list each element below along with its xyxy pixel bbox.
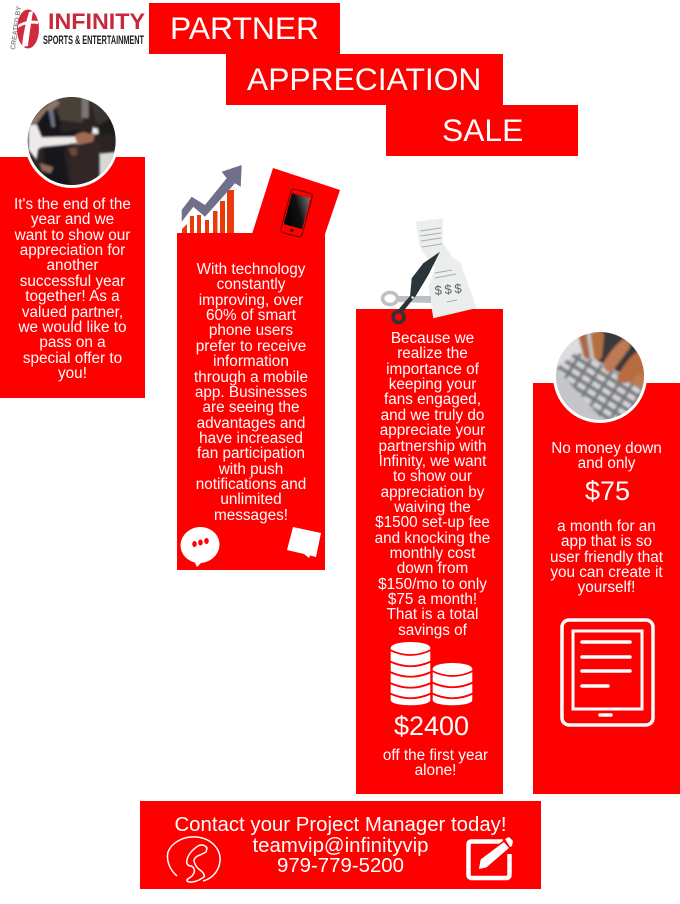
text: monthly price description: user friendly that <box>550 549 663 566</box>
text: offer explanation: That is a total <box>387 606 478 623</box>
panel: mobile app adoption <box>177 233 325 570</box>
title block: APPRECIATION: APPRECIATION <box>247 61 481 97</box>
photo: hands typing on keyboard <box>554 332 646 423</box>
text: offer explanation: importance of <box>386 361 479 378</box>
text: mobile app statistics: through a mobile <box>194 369 308 386</box>
text: contact call to action: 979-779-5200 <box>277 855 404 877</box>
text: monthly price description: you can create it <box>550 564 663 581</box>
text: appreciation message: special offer to <box>23 350 122 367</box>
text: mobile app statistics: 60% of smart <box>206 307 296 324</box>
title block: PARTNER: PARTNER <box>170 10 319 46</box>
text: mobile app statistics: phone users <box>209 322 293 339</box>
panel: app price <box>533 383 680 794</box>
text: offer explanation: savings of <box>398 622 467 639</box>
text: mobile app statistics: constantly <box>217 276 285 293</box>
text: offer explanation: partnership with <box>378 438 486 455</box>
logo: Infinity Sports & Entertainment: CREATED BY <box>10 5 23 50</box>
title block: SALE <box>386 105 578 156</box>
text: monthly price description: a month for an <box>557 518 656 535</box>
text: mobile app statistics: messages! <box>214 507 288 524</box>
text: contact call to action <box>174 814 507 877</box>
text: offer explanation: Because we <box>391 330 474 347</box>
text: mobile app statistics: With technology <box>197 261 305 278</box>
text: offer explanation: $75 a month! <box>388 591 477 608</box>
text: monthly price description <box>550 518 663 596</box>
text: appreciation message: another <box>47 257 98 274</box>
icon: phone handset in circle <box>166 836 221 883</box>
text: contact call to action: Contact your Project Manager today! <box>174 814 507 836</box>
panel: contact footer <box>140 801 541 889</box>
icon: stacks of coins <box>390 642 472 706</box>
text: contact call to action: teamvip@infinityvip <box>253 835 428 857</box>
text: no money down <box>551 440 662 472</box>
figure: $75 monthly price: $75 <box>585 476 630 506</box>
icon: tilted red tab with smartphone <box>252 168 340 238</box>
text: appreciation message: year and we <box>31 211 114 228</box>
text: offer explanation: monthly cost <box>390 545 475 562</box>
text: mobile app statistics: have increased <box>199 430 303 447</box>
text: offer explanation: down from <box>397 560 468 577</box>
text: monthly price description: yourself! <box>578 579 635 596</box>
text: appreciation message: valued partner, <box>22 304 123 321</box>
text: mobile app statistics: are seeing the <box>203 399 299 416</box>
text: appreciation message: pass on a <box>39 334 106 351</box>
text: offer explanation: waiving the <box>394 499 471 516</box>
text: mobile app statistics: information <box>213 353 289 370</box>
text: mobile app statistics: advantages and <box>197 415 305 432</box>
figure: $2400 savings: $2400 <box>394 711 469 741</box>
text: mobile app statistics: with push <box>219 461 283 478</box>
text: offer explanation: $150/mo to only <box>378 576 487 593</box>
text: no money down: No money down <box>551 440 662 457</box>
text: offer explanation: $1500 set-up fee <box>375 514 490 531</box>
icon: square speech bubble <box>287 527 321 558</box>
logo: Infinity Sports & Entertainment: INFINITY <box>48 9 145 34</box>
text: off the first year: alone! <box>415 762 456 779</box>
text: appreciation message: successful year <box>20 273 125 290</box>
text: no money down: and only <box>578 455 635 472</box>
text: appreciation message <box>14 196 131 382</box>
text: offer explanation: realize the <box>397 345 468 362</box>
text: offer explanation <box>375 330 490 639</box>
text: offer explanation: Infinity, we want <box>379 453 486 470</box>
text: offer explanation: to show our <box>393 468 472 485</box>
panel: year-end appreciation message <box>0 157 145 398</box>
text: mobile app statistics: notifications and <box>196 476 306 493</box>
text: mobile app statistics: improving, over <box>199 292 303 309</box>
text: appreciation message: appreciation for <box>20 242 125 259</box>
text: offer explanation: and we truly do <box>381 407 484 424</box>
text: appreciation message: want to show our <box>15 227 130 244</box>
text: appreciation message: you! <box>58 365 87 382</box>
icon: tablet with text lines <box>560 618 655 727</box>
text: offer explanation: appreciation by <box>381 484 484 501</box>
text: mobile app statistics <box>194 261 308 524</box>
icon: scissors cutting a receipt <box>380 218 476 324</box>
icon: rising bar chart with arrow <box>182 165 242 233</box>
text: offer explanation: and knocking the <box>375 530 490 547</box>
text: offer explanation: fans engaged, <box>384 391 481 408</box>
logo: Infinity Sports & Entertainment <box>10 5 145 50</box>
panel: savings offer <box>356 309 503 794</box>
text: mobile app statistics: app. Businesses <box>195 384 307 401</box>
text: mobile app statistics: unlimited <box>220 491 282 508</box>
text: mobile app statistics: prefer to receive <box>196 338 306 355</box>
text: appreciation message: together! As a <box>25 288 120 305</box>
text: offer explanation: keeping your <box>389 376 476 393</box>
icon: scissors cutting a receipt: $ $ $ <box>434 281 463 298</box>
icon: round chat bubble <box>180 527 220 567</box>
text: off the first year: off the first year <box>383 747 488 764</box>
text: appreciation message: we would like to <box>18 319 126 336</box>
text: appreciation message: It's the end of the <box>14 196 131 213</box>
photo: business handshake <box>28 97 116 188</box>
text: mobile app statistics: fan participation <box>197 445 305 462</box>
title block: SALE: SALE <box>442 112 523 148</box>
title block: APPRECIATION <box>226 54 503 105</box>
text: monthly price description: app that is so <box>561 533 652 550</box>
text: offer explanation: appreciate your <box>380 422 485 439</box>
icon: pencil on notepad <box>466 837 513 880</box>
title block: PARTNER <box>149 3 340 54</box>
text: off the first year <box>383 747 488 779</box>
